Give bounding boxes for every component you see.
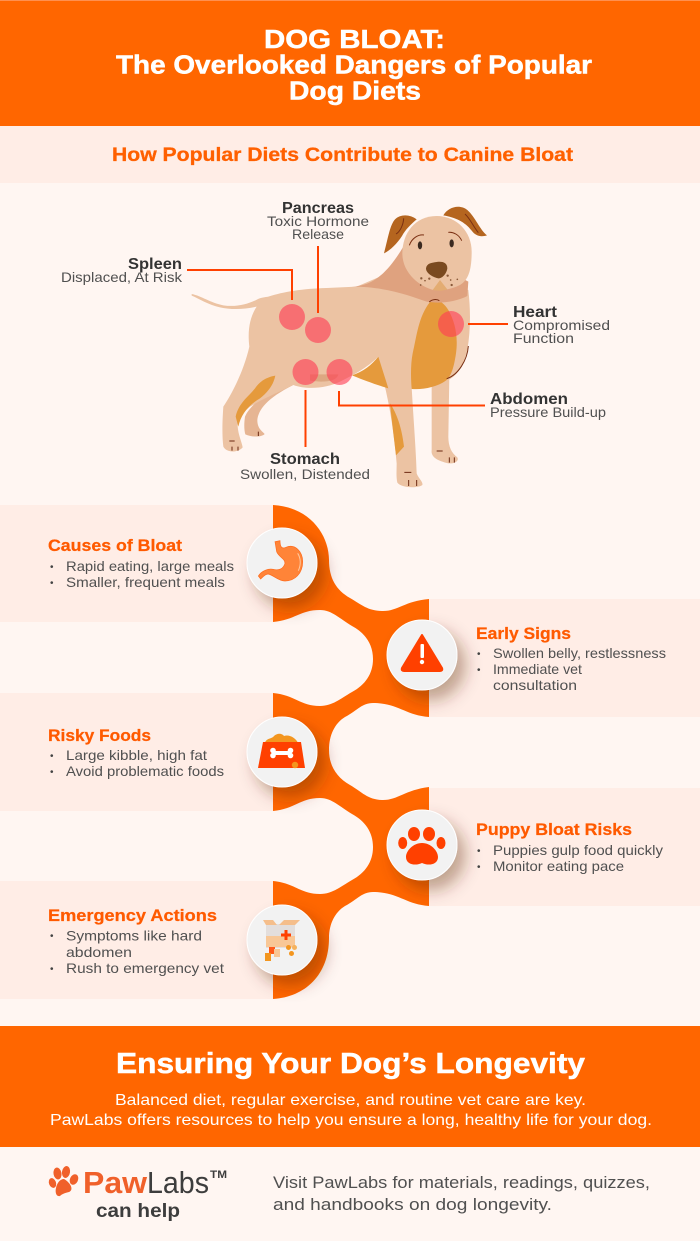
bullet list: Swollen belly, restlessness: [493, 645, 666, 661]
bullet list: Immediate vet: [493, 661, 582, 677]
label: heart: Compromised: [513, 317, 610, 333]
label: stomach: Swollen, Distended: [240, 466, 370, 482]
panel: puppy bloat risks: [429, 788, 700, 906]
bullet list: Rapid eating, large meals: [66, 558, 234, 574]
closing text: Balanced diet, regular exercise, and routine vet care are key.: [115, 1092, 586, 1109]
panel: risky foods: [0, 693, 273, 811]
call to action text: Visit PawLabs for materials, readings, quizzes,: [273, 1173, 650, 1192]
label: heart: Function: [513, 330, 574, 346]
bullet list: •: [477, 665, 481, 676]
tagline: can help: [96, 1201, 180, 1222]
title: Dog Diets: [289, 76, 421, 106]
bullet list: •: [50, 767, 54, 778]
subheading: How Popular Diets Contribute to Canine Bloat: [112, 145, 574, 166]
label: abdomen: [490, 391, 606, 420]
closing heading: Ensuring Your Dog’s Longevity: [116, 1048, 585, 1080]
label: spleen: Displaced, At Risk: [61, 269, 183, 285]
bullet list: Symptoms like hard: [66, 928, 202, 944]
label: spleen: Spleen: [128, 256, 182, 273]
connecting ribbon: [273, 505, 429, 999]
title: The Overlooked Dangers of Popular: [116, 50, 592, 80]
bullet list: Rush to emergency vet: [66, 960, 224, 976]
title: DOG BLOAT:: [264, 24, 445, 54]
bullet list: [477, 645, 666, 693]
connector lines: [187, 246, 508, 447]
logo: pawlabs: Labs: [147, 1165, 209, 1200]
bullet list: •: [50, 964, 54, 975]
closing text: PawLabs offers resources to help you ensure a long, healthy life for your dog.: [50, 1112, 652, 1129]
icon: logo paw: [48, 1165, 80, 1196]
bullet list: •: [477, 846, 481, 857]
header banner: [0, 0, 700, 126]
title: [116, 24, 592, 106]
illustration: dog: [192, 207, 487, 487]
dog anatomy diagram: [61, 200, 610, 487]
label: abdomen: Pressure Build-up: [490, 404, 606, 420]
bullet list: [50, 558, 234, 590]
label: pancreas: Pancreas: [282, 200, 354, 217]
icon: warning triangle: [387, 620, 457, 690]
bullet list: •: [477, 862, 481, 873]
heading: Risky Foods: [48, 726, 151, 745]
label: spleen: [61, 256, 183, 285]
bullet list: •: [50, 578, 54, 589]
organ markers: [279, 304, 464, 385]
label: pancreas: Toxic Hormone: [267, 213, 369, 229]
bullet list: Large kibble, high fat: [66, 747, 207, 763]
subheading band: [0, 126, 700, 183]
call to action text: [273, 1173, 650, 1214]
bullet list: [50, 747, 224, 779]
logo: pawlabs: TM: [210, 1169, 227, 1181]
bullet list: •: [50, 931, 54, 942]
closing banner: [0, 1026, 700, 1147]
bullet list: [477, 842, 663, 874]
wordmark: Paw: [83, 1165, 148, 1200]
bullet list: consultation: [493, 677, 577, 693]
bullet list: •: [477, 649, 481, 660]
label: stomach: Stomach: [270, 451, 340, 468]
icon: food bowl: [247, 717, 317, 787]
logo: pawlabs: [48, 1165, 227, 1222]
heading: Puppy Bloat Risks: [476, 820, 632, 839]
icon: paw: [387, 810, 457, 880]
label: heart: [513, 304, 610, 346]
bullet list: Smaller, frequent meals: [66, 574, 225, 590]
bullet list: Monitor eating pace: [493, 858, 624, 874]
panel: causes of bloat: [0, 505, 273, 622]
heading: Early Signs: [476, 624, 571, 643]
closing text: [50, 1092, 652, 1129]
bullet list: •: [50, 751, 54, 762]
heading: Emergency Actions: [48, 906, 217, 925]
label: heart: Heart: [513, 304, 557, 321]
bullet list: •: [50, 562, 54, 573]
icon: first aid box: [247, 905, 317, 975]
heading: Causes of Bloat: [48, 536, 182, 555]
label: stomach: [240, 451, 370, 482]
call to action text: and handbooks on dog longevity.: [273, 1195, 552, 1214]
label: pancreas: Release: [292, 226, 344, 242]
bullet list: Avoid problematic foods: [66, 763, 224, 779]
icon: stomach: [247, 528, 317, 598]
bullet list: [50, 928, 224, 976]
bullet list: Puppies gulp food quickly: [493, 842, 663, 858]
panel: emergency actions: [0, 881, 273, 999]
panel: early signs: [429, 599, 700, 717]
label: pancreas: [267, 200, 369, 242]
label: abdomen: Abdomen: [490, 391, 568, 408]
bullet list: abdomen: [66, 944, 132, 960]
